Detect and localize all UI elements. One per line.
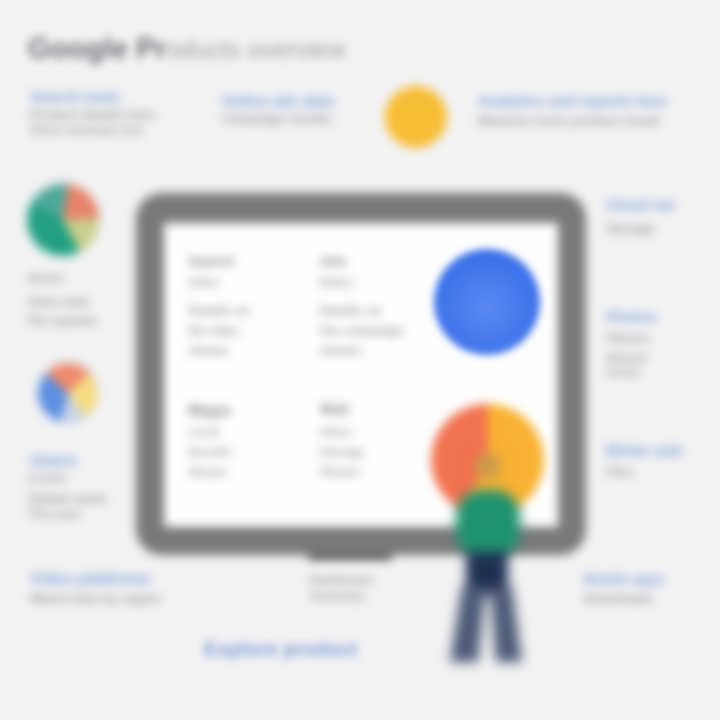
text block: bottom right: Mobile apps [584,571,665,587]
text block: right 2: Shared [606,351,647,365]
screen text: bottom left: Shown [188,465,227,479]
monitor frame [136,193,586,555]
screen text: top middle: the campaign [320,323,404,338]
screen text: top left: Search [188,253,235,269]
screen text: top middle: Rates [320,275,353,289]
screen text: bottom left: Results [188,445,231,459]
text block: top right: Analytics and reports here [478,93,667,110]
text block: bottom left [26,568,163,609]
text block: right 2: Photos [606,309,657,326]
illustration: person [442,448,530,672]
screen text: top middle [316,252,406,360]
text block: top middle: Campaign results [222,111,331,126]
screen text: bottom middle: Mail [320,401,349,418]
screen text: bottom left: Maps [188,401,231,420]
text block: left middle: Share data [28,295,89,309]
text block: under monitor: Summary [310,589,365,603]
screen text: bottom left [184,400,235,481]
text block: right 2: Albums [606,331,650,345]
title: Google Products overview [28,33,346,65]
monitor stand [308,540,392,560]
screen text: bottom middle [316,399,367,481]
text block: under monitor [307,572,376,604]
screen text: bottom left: Local [188,425,219,439]
text block: right 3 [602,439,686,480]
text block: left middle: Per quarter [28,313,97,328]
text block: bottom left: Video platforms [30,571,151,588]
screen text: top left: Index [188,275,219,289]
screen text: top left: shown [188,343,229,358]
text block: top left [26,88,157,138]
text block: right 3: Files [606,465,633,479]
text block: right 2 [602,306,660,380]
text block: right 2: Online [606,367,640,379]
text block: right 1: Cloud set [606,197,674,214]
text block: under monitor: Dashboard [310,573,373,587]
text block: top left: Short summary text [30,123,143,137]
screen text: top left: the data [188,323,238,338]
text block: right 1: Storage [606,221,654,236]
text block: top left: Product details here [30,107,155,122]
text block: left middle [25,270,98,330]
text block: left lower: Global reach [28,491,107,506]
screen text: top left: Details on [188,303,250,318]
text block: bottom left: Watch time by region [30,591,161,606]
icon: pie chart green [19,176,106,264]
screen text: bottom middle: Storage [320,445,365,459]
text block: left lower [26,450,108,522]
monitor [128,186,594,568]
screen text: top left [184,252,252,360]
text block: bottom right: Downloads [584,591,653,606]
icon: pie chart multicolour [30,356,104,428]
text block: top middle [218,90,338,129]
icon: orange and yellow circle [424,396,552,514]
text block: right 1 [602,195,678,239]
text block: left lower: Growth [28,473,66,485]
text block: left lower: Users [30,451,77,470]
text block: left middle: Market [28,273,63,285]
text block: top middle: Online ads data [222,93,334,110]
icon: yellow circle [385,86,447,148]
screen text: bottom middle: Inbox [320,425,352,439]
text block: left lower: This year [28,507,81,521]
screen text: top middle: shown [320,343,361,358]
caption: Explore product [204,639,357,661]
icon: blue circle [434,249,540,355]
text block: right 3: Drive use [606,441,683,460]
text block: bottom right [580,570,668,608]
text block: top right: Measure every product result [478,113,659,128]
screen text: top middle: Details on [320,303,382,318]
text block: top right [474,91,671,130]
screen text: bottom middle: Shown [320,465,359,479]
text block: top left: Search tools [30,89,120,106]
screen text: top middle: Ads [320,253,346,269]
